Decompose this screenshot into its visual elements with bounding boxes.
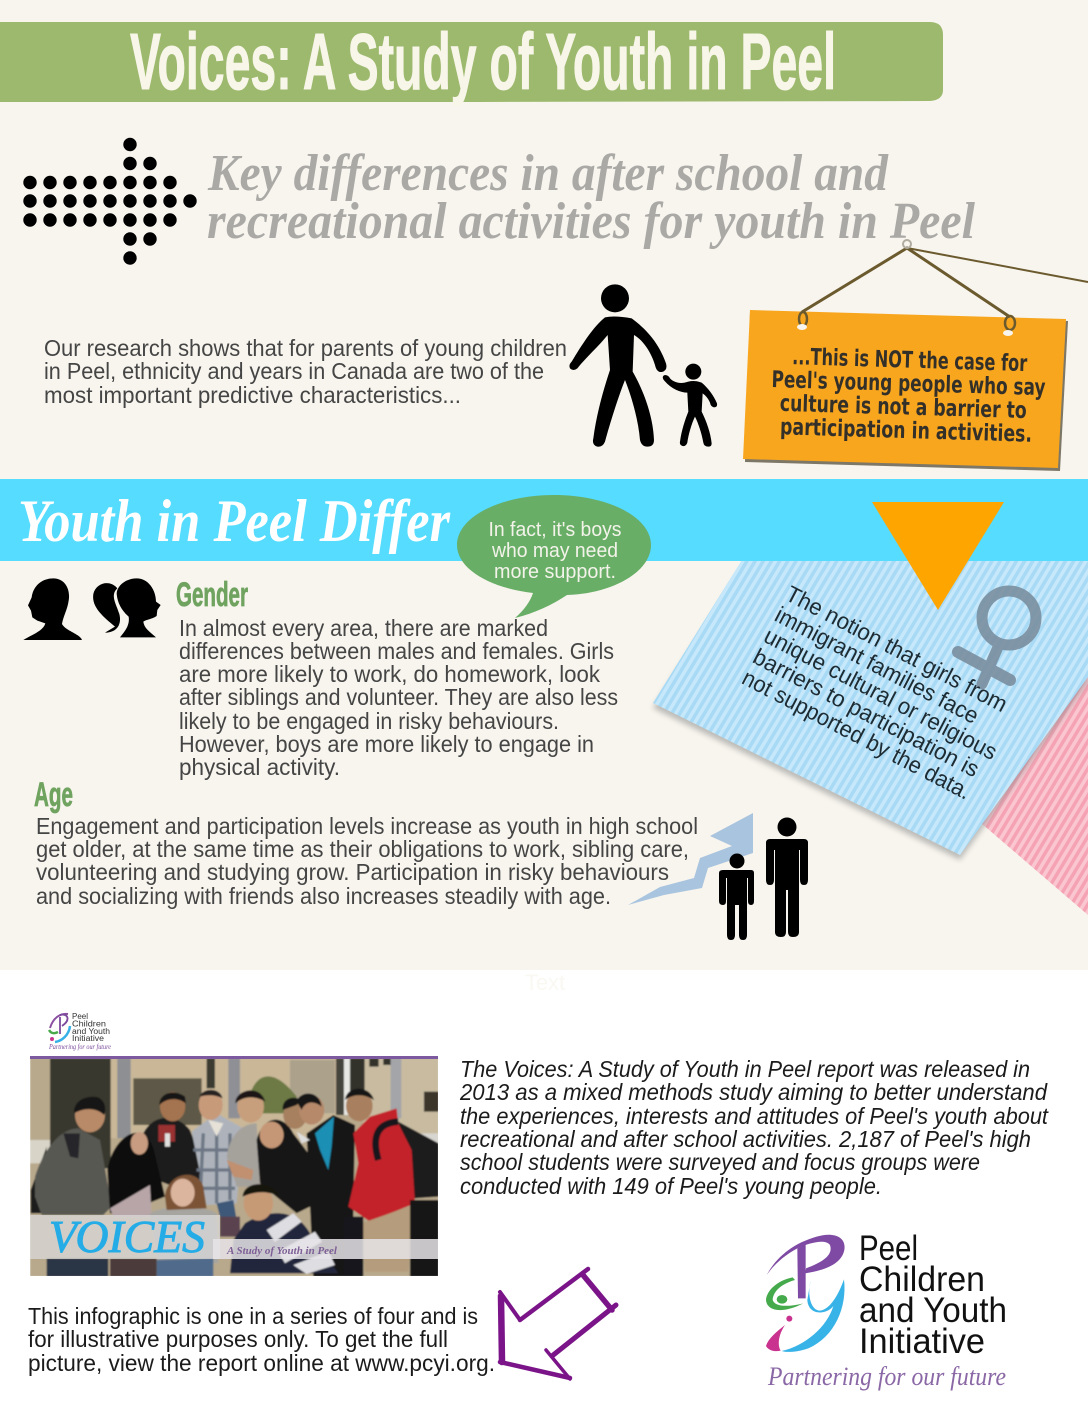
- speech bubble: In fact, it's boys: [488, 518, 622, 541]
- gender text: are more likely to work, do homework, look: [179, 661, 600, 687]
- gender text: However, boys are more likely to engage in: [179, 731, 594, 757]
- age heading: Age: [34, 776, 73, 814]
- paper callout text: barriers to participation is: [749, 643, 984, 782]
- man front striped: [230, 1213, 338, 1273]
- speech bubble: who may need: [491, 539, 618, 562]
- woman dark hair: [257, 1120, 318, 1213]
- background building: [30, 1056, 439, 1277]
- gender text: differences between males and females. Girls: [179, 638, 614, 664]
- logo wordmark: Children: [859, 1260, 985, 1299]
- paper callout text: not supported by the data.: [738, 664, 975, 804]
- large logo: [766, 1229, 1007, 1391]
- report description: the experiences, interests and attitudes of Peel's youth about: [460, 1103, 1050, 1129]
- gender text: likely to be engaged in risky behaviours.: [179, 708, 559, 734]
- gender text: In almost every area, there are marked: [179, 615, 548, 641]
- icon: two youth figures: [719, 818, 808, 940]
- man in red hoodie: [398, 1122, 439, 1198]
- footer note: [28, 1303, 495, 1376]
- panel: pink paper: [960, 660, 1088, 915]
- logo wordmark: and Youth: [859, 1291, 1007, 1330]
- icon: dotted arrow: [23, 138, 197, 265]
- small logo: Peel: [72, 1012, 88, 1021]
- logo wordmark: [859, 1229, 1007, 1361]
- paper callout text: unique cultural or religious: [760, 622, 1002, 765]
- woman in hijab: [107, 1133, 165, 1213]
- paper callout text: The notion that girls from: [782, 580, 1012, 717]
- age text: get older, at the same time as their obligations to work, sibling care,: [36, 836, 689, 862]
- logo tagline: Partnering for our future: [767, 1362, 1006, 1391]
- intro text: most important predictive characteristics...: [44, 382, 461, 408]
- title banner: [0, 17, 943, 106]
- man grey shirt: [227, 1123, 260, 1187]
- icon: female symbol: [958, 591, 1036, 684]
- report description: 2013 as a mixed methods study aiming to better understand: [459, 1079, 1048, 1105]
- panel: blue paper: [653, 555, 1088, 860]
- photo: group of youth: [30, 1056, 439, 1277]
- icon: purple sketch arrow: [500, 1269, 616, 1379]
- sign ropes: [797, 240, 1088, 336]
- sign text: [770, 344, 1046, 448]
- subtitle heading: [207, 145, 975, 250]
- man dark hoodie: [307, 1115, 355, 1277]
- age text: [36, 813, 698, 909]
- small logo: Children: [72, 1020, 106, 1028]
- subtitle heading: Key differences in after school and: [207, 145, 889, 202]
- age text: volunteering and studying grow. Participation in risky behaviours: [36, 859, 669, 885]
- footer note: This infographic is one in a series of four and is: [28, 1303, 478, 1329]
- man plaid: [192, 1113, 243, 1205]
- age text: Engagement and participation levels increase as youth in high school: [36, 813, 698, 839]
- small logo: Initiative: [72, 1034, 105, 1043]
- cyan band: [0, 479, 1088, 561]
- report description: [459, 1056, 1050, 1199]
- logo wordmark: Initiative: [859, 1322, 985, 1361]
- small logo: and Youth: [72, 1027, 110, 1036]
- logo wordmark: Peel: [859, 1229, 918, 1268]
- age text: and socializing with friends also increases steadily with age.: [36, 883, 611, 909]
- paper callout text: immigrant families face: [771, 601, 983, 729]
- small logo: [48, 1012, 111, 1051]
- VOICES banner: A Study of Youth in Peel: [226, 1246, 337, 1257]
- intro text: in Peel, ethnicity and years in Canada are two of the: [44, 358, 544, 384]
- speech bubble: more support.: [494, 560, 616, 583]
- report description: conducted with 149 of Peel's young people.: [460, 1173, 882, 1199]
- subtitle heading: recreational activities for youth in Peel: [207, 193, 975, 250]
- icon: parent and child: [569, 284, 717, 447]
- faint placeholder text: Text: [525, 970, 565, 995]
- report description: recreational and after school activities. 2,187 of Peel's high: [460, 1126, 1031, 1152]
- speech bubble: [457, 495, 651, 618]
- VOICES banner: VOICES: [49, 1211, 205, 1262]
- man back black jacket: [142, 1118, 201, 1186]
- man grey jacket: [31, 1147, 47, 1213]
- paper callout text: [738, 580, 1023, 807]
- gender text: after siblings and volunteer. They are also less: [179, 684, 618, 710]
- gender text: [179, 615, 618, 780]
- footer note: for illustrative purposes only. To get the full: [28, 1326, 448, 1352]
- section heading: Youth in Peel Differ: [18, 488, 451, 554]
- intro text: [44, 335, 567, 408]
- intro text: Our research shows that for parents of young children: [44, 335, 567, 361]
- icon: male and female heads: [23, 578, 161, 640]
- footer note: picture, view the report online at www.pcyi.org.: [28, 1350, 495, 1376]
- small logo: Partnering for our future: [48, 1043, 111, 1051]
- VOICES banner: [30, 1215, 438, 1259]
- icon: rising arrow: [628, 813, 753, 905]
- orange triangle: [872, 502, 1004, 610]
- gender heading: Gender: [176, 576, 248, 614]
- report description: school students were surveyed and focus groups were: [460, 1149, 980, 1175]
- hanging sign: [743, 240, 1088, 471]
- girl seated: [150, 1207, 218, 1263]
- report description: The Voices: A Study of Youth in Peel report was released in: [460, 1056, 1030, 1082]
- gender text: physical activity.: [179, 754, 340, 780]
